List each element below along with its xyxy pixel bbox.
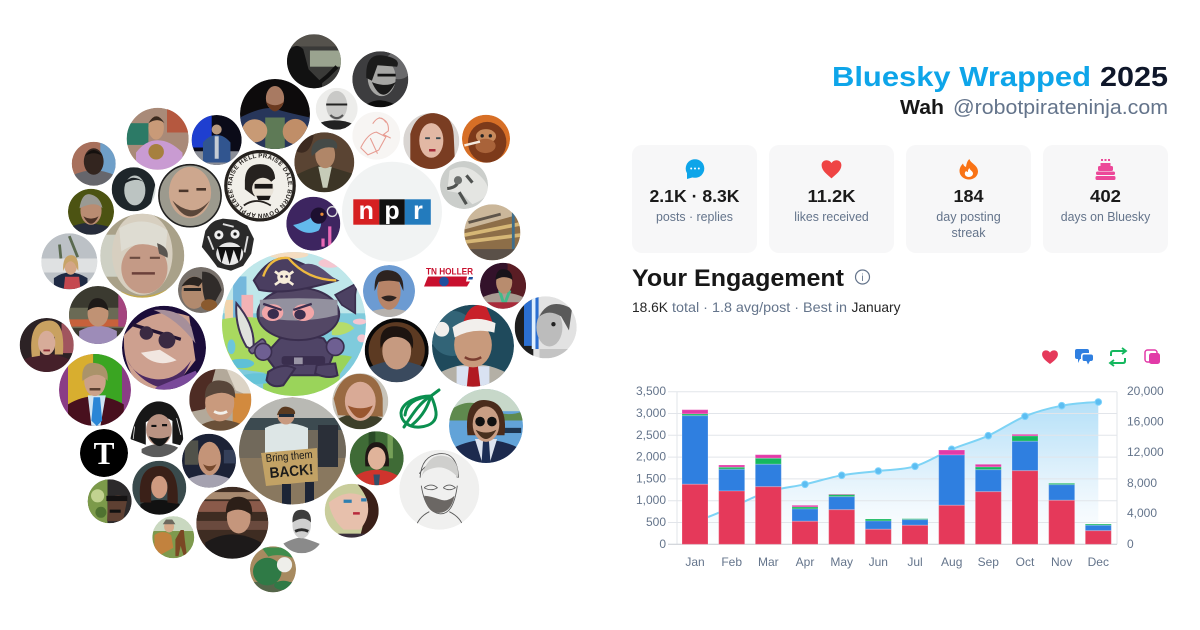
card: posts and replies: [632, 145, 757, 253]
bar: April: [792, 505, 818, 544]
avatar: man with sunglasses by water: [449, 389, 523, 463]
avatar: black and white monster: [201, 217, 255, 271]
title: 2025: [1100, 61, 1168, 92]
left axis labels: 1,000: [636, 493, 666, 507]
avatar: grey haired man on green: [68, 189, 114, 235]
left axis labels: 2,000: [636, 450, 666, 464]
avatar: man in beanie: [294, 132, 354, 192]
bar: October: [1012, 434, 1038, 544]
card: posting streak: streak: [952, 226, 986, 240]
avatar: NPR logo: r: [413, 197, 423, 225]
left axis labels: [636, 384, 666, 551]
avatar: split portrait with blue light: [515, 296, 577, 358]
month labels: Jul: [907, 555, 923, 569]
card: likes: likes received: [794, 210, 869, 224]
left axis labels: 3,000: [636, 406, 666, 420]
month labels: Feb: [721, 555, 742, 569]
avatar: bald man with goatee: [182, 434, 236, 488]
bar: February: [719, 465, 745, 544]
icon: chat bubble: [686, 159, 704, 179]
avatar: protester holding sign: BACK!: [269, 461, 314, 482]
left axis labels: 0: [659, 537, 666, 551]
left axis labels: 500: [646, 515, 666, 529]
logo: TN Holler: [424, 266, 473, 286]
avatar: man with sunglasses half leaves: [88, 479, 132, 523]
right axis labels: 4,000: [1127, 506, 1157, 520]
avatar: protester holding sign: Bring them: [265, 449, 313, 465]
text: engagement summary: 18.6K: [632, 299, 669, 315]
icon: likes: [1042, 350, 1058, 364]
avatar: blond woman: [20, 318, 74, 372]
avatar: pirate ninja main illustration: [220, 250, 370, 400]
line points: [802, 399, 1102, 488]
avatar: man on blue background: [363, 265, 415, 317]
left axis labels: 1,500: [636, 472, 666, 486]
icon: quotes: [1145, 350, 1160, 364]
right axis labels: 12,000: [1127, 445, 1164, 459]
avatar: NPR logo: [342, 162, 442, 262]
avatar: NPR logo: p: [384, 197, 400, 225]
avatar: man in pink shirt with coconut: [127, 108, 189, 170]
avatar: woman outdoors with palm trees: [41, 233, 97, 289]
avatar: woman with curly hair: [132, 461, 186, 515]
card: likes: 11.2K: [808, 186, 856, 206]
card: posts and replies: 2.1K · 8.3K: [650, 186, 740, 206]
icon: cake: [1096, 159, 1116, 180]
avatar: man with black ring: [365, 318, 429, 382]
avatar: bearded man with glasses in monochrome: [352, 51, 412, 107]
avatar: monochrome man with moustache: [280, 509, 324, 553]
month labels: Apr: [796, 555, 814, 569]
month labels: Oct: [1016, 555, 1035, 569]
avatar: smiling man in airplane seat: [189, 369, 251, 431]
avatar: NPR logo: n: [359, 197, 374, 225]
logo: the onion: [401, 390, 439, 427]
right axis labels: [1127, 384, 1164, 551]
avatar: woman in monochrome: [112, 167, 156, 211]
avatar: New York Times building: [464, 204, 520, 260]
panel: stat cards: [632, 145, 1168, 253]
icon: info: [856, 270, 870, 284]
avatar: man in lavender shirt: [69, 286, 127, 344]
avatar: man with santa hat: [430, 305, 514, 387]
avatar: woman with dark hair: [325, 484, 379, 538]
avatar: view from inside a car: [287, 34, 341, 88]
bar: August: [939, 450, 965, 544]
month labels: Mar: [758, 555, 779, 569]
avatar: bald smiling man: [158, 164, 222, 228]
left axis labels: 3,500: [636, 384, 666, 398]
icon: flame: [960, 159, 978, 180]
title: Bluesky Wrapped: [832, 61, 1091, 92]
text: engagement summary: [632, 299, 900, 315]
logo: TN Holler: TN HOLLER: [426, 266, 473, 276]
card: likes: [769, 145, 894, 253]
card: posts and replies: posts · replies: [656, 210, 733, 224]
avatar: person with glasses and dog: [178, 267, 224, 313]
avatar: red line sketch: [352, 112, 400, 160]
avatar: protester holding sign: [239, 398, 346, 506]
panel: avatar bubble cluster: [20, 34, 576, 592]
avatar: grey skull engraving: [440, 161, 488, 209]
avatar: cartoon man with long hair: [129, 401, 185, 457]
bar: June: [865, 519, 891, 544]
bar: July: [902, 519, 928, 544]
cumulative line: [695, 402, 1098, 521]
avatar: laughing man with glasses: [122, 306, 206, 390]
title: [832, 61, 1168, 92]
avatar: man in suit on blue stage: [192, 115, 242, 165]
month labels: Sep: [978, 555, 999, 569]
heading: your engagement: Your Engagement: [632, 265, 844, 292]
month labels: Dec: [1088, 555, 1109, 569]
right axis labels: 8,000: [1127, 476, 1157, 490]
avatar: man with ginger beard: [332, 373, 388, 429]
icon: info: i: [861, 273, 864, 284]
avatar: man with lanyard: [480, 263, 526, 309]
chart: engagement by month: [636, 384, 1164, 569]
icon: heart: [822, 160, 841, 178]
avatar: man in maroon suit with curtains: [59, 354, 131, 426]
avatar: new york times T logo: [80, 429, 128, 477]
text: engagement summary: January: [852, 299, 900, 315]
legend: chart series icons: [1042, 348, 1160, 366]
left axis labels: 2,500: [636, 428, 666, 442]
month labels: Jan: [685, 555, 705, 569]
bar: January: [682, 410, 708, 544]
bar: May: [829, 494, 855, 544]
avatar: bearded man holding cats: [240, 79, 310, 149]
avatar: bald man with glasses in monochrome: [316, 88, 358, 130]
month labels: May: [830, 555, 853, 569]
month labels: Jun: [869, 555, 888, 569]
card: days on Bluesky: days on Bluesky: [1061, 210, 1151, 224]
avatar: smoking monkey: [462, 115, 510, 163]
grid lines: [668, 392, 1117, 544]
avatar: pencil sketch of bearded man: [399, 450, 479, 530]
right axis labels: 0: [1127, 537, 1134, 551]
card: posting streak: [906, 145, 1031, 253]
icon: reposts: [1110, 348, 1126, 366]
avatar: woman in red jacket: [350, 431, 404, 485]
text: engagement summary: total · 1.8 avg/post · Best in: [672, 299, 847, 315]
month labels: Aug: [941, 555, 962, 569]
card: posting streak: 184: [954, 186, 984, 206]
avatar: green yoshi toy: [250, 546, 296, 593]
avatar: red haired woman: [403, 113, 459, 169]
card: days on Bluesky: 402: [1090, 186, 1121, 206]
bar: September: [975, 464, 1001, 544]
card: days on Bluesky: [1043, 145, 1168, 253]
panel: header: [832, 61, 1168, 119]
bar: December: [1085, 524, 1111, 544]
avatar: person with llama: [152, 516, 194, 558]
avatar: face in plastic wrap: [100, 212, 184, 298]
card: posting streak: day posting: [936, 210, 1001, 224]
avatar: man in front of bookshelves: [196, 487, 268, 559]
month labels: Nov: [1051, 555, 1072, 569]
avatar: new york times T logo: T: [94, 436, 115, 471]
user name and handle: Wah: [900, 97, 944, 119]
icon: replies: [1075, 349, 1093, 364]
bar: November: [1049, 483, 1075, 544]
cumulative area: [695, 402, 1098, 544]
avatar: dark man with hoodie: [72, 142, 116, 186]
avatar: purple bird finance art: [286, 197, 340, 251]
bar: March: [755, 455, 781, 544]
month labels: [685, 555, 1109, 569]
right axis labels: 16,000: [1127, 414, 1164, 428]
user name and handle: @robotpirateninja.com: [953, 97, 1168, 119]
right axis labels: 20,000: [1127, 384, 1164, 398]
